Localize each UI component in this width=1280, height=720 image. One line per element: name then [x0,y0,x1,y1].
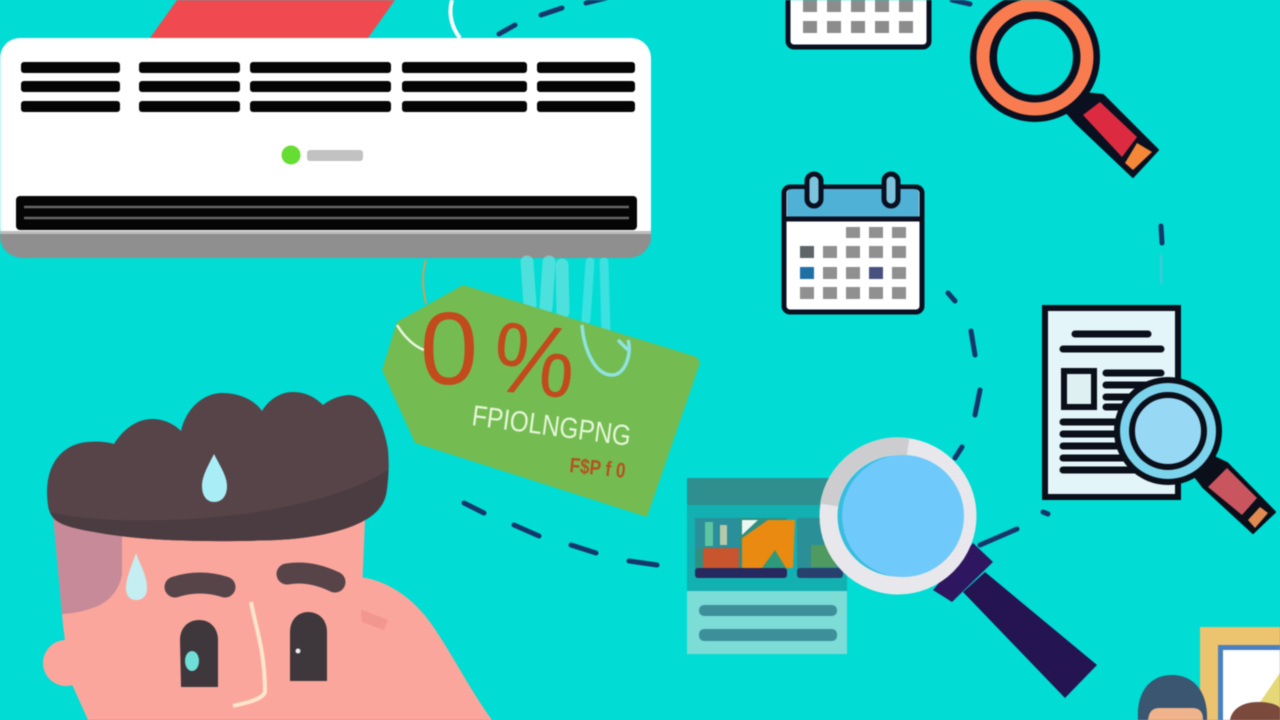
hand [345,577,492,720]
document with magnifying glass [1045,308,1275,533]
bottom cover [0,231,651,258]
percent sign: % [488,300,581,420]
handle base [1060,92,1158,177]
large magnifying glass [828,446,1097,698]
right eyebrow [287,573,335,582]
handle collar [933,543,993,602]
binder rings [807,174,821,206]
handle [1083,102,1137,157]
card header [687,478,847,505]
hair [47,392,389,541]
date squares [800,227,906,299]
sweat drop on forehead [126,553,147,600]
text lines [1063,334,1161,470]
magnifier tip [1248,507,1268,528]
sweating person [43,392,492,720]
tag loop [397,325,424,350]
card text lines [699,605,837,616]
magnifier handle [1208,468,1257,515]
top vents [21,62,635,112]
status light [282,146,300,164]
bottom right picture frame [1200,627,1280,720]
display pill [307,150,363,161]
tag label: FPIOLNGPNG [470,400,633,453]
person with brown hair [1230,702,1280,720]
handle [963,572,1097,698]
lens [842,455,964,577]
air outlet [16,196,637,230]
tag small text: F$P f 0 [568,454,627,483]
ring band [983,5,1087,109]
discount percentage: 0 [420,291,478,406]
card middle [687,505,847,591]
unit body [0,38,651,248]
handle tip [1125,143,1152,170]
left eyebrow [175,583,225,587]
card thumbnail [695,518,843,578]
dashed path connecting the icons [464,0,1162,565]
cold air drips [527,262,606,335]
ring outline [984,6,1086,108]
finger detail [360,609,388,630]
orange magnifying glass [983,5,1158,177]
glass ring [828,446,968,586]
drip loop [582,325,629,375]
top calendar [788,0,929,47]
red diagonal band behind air conditioner [150,0,395,38]
ring shadow arc [829,446,908,505]
calendar [784,174,922,312]
web page card [687,478,847,654]
picture box [1064,371,1094,407]
ear [43,640,89,686]
tag shape [382,285,700,517]
magnifier lens [1132,395,1204,467]
magnifier ring [1117,380,1219,482]
hair shadow band [50,470,388,541]
air conditioner [0,38,651,258]
tag string [423,260,426,304]
white curved line [450,0,460,38]
magnifier handle base [1190,455,1275,533]
face [53,515,365,720]
price tag [382,285,700,517]
calendar page [784,187,922,312]
face shadow [53,515,122,614]
card footer [687,591,847,654]
person with blue hair [1138,675,1207,720]
left eye [180,620,218,687]
sweat drop on hair [202,454,227,502]
paper [1045,308,1178,497]
calendar header [787,189,919,218]
right eye [290,612,327,681]
nose [233,602,265,706]
